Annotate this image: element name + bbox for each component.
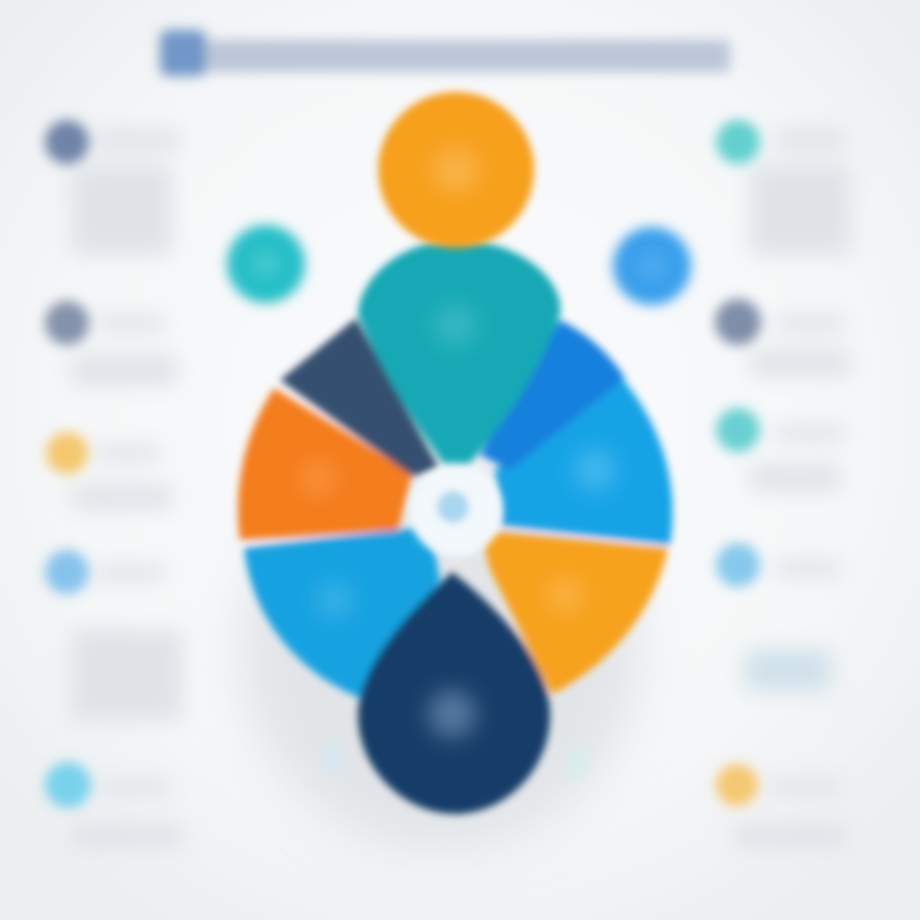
right column icons [715,120,761,806]
segment: light blue right [495,370,673,545]
segment: blue upper right [480,320,625,470]
segment: dark navy drop [358,572,550,814]
diagram [238,240,673,814]
blue side circle [613,227,691,305]
title banner [160,30,730,76]
title icon [160,30,206,76]
top circle icon [434,148,478,192]
chart shadow [240,450,640,850]
center hub [409,463,503,557]
segment: orange left [238,388,412,540]
small accents below drop [325,745,585,775]
segment: navy [280,318,440,476]
segment: amber lower right [480,530,668,694]
top orange circle [378,92,534,248]
segment: teal top [358,240,560,480]
segment: light blue lower left [244,526,440,700]
segment icons [300,305,615,738]
left column text [72,130,182,847]
teal side circle [227,225,305,303]
left column icons [45,120,91,808]
right column text [735,130,850,847]
